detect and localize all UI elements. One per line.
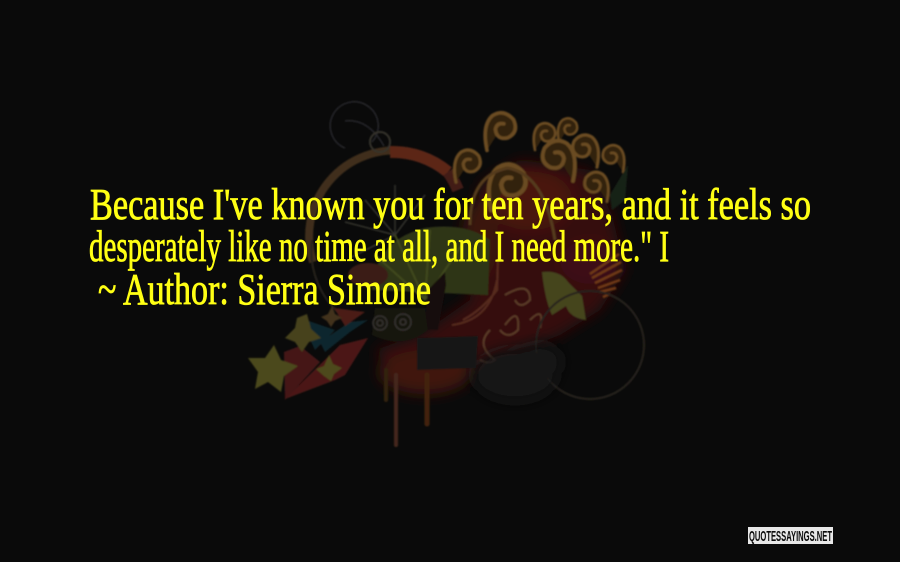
drips — [386, 370, 427, 445]
star streaks — [285, 338, 368, 399]
background illustration — [248, 102, 644, 445]
concentric circles — [372, 308, 428, 341]
author line: ~ Author: Sierra Simone — [98, 265, 431, 314]
orange fan — [590, 254, 622, 297]
stripe patch — [417, 336, 478, 370]
dark silhouette — [424, 272, 446, 330]
stars — [248, 306, 342, 392]
green fan — [372, 226, 490, 295]
quote text — [89, 180, 811, 314]
wheel ring — [309, 102, 458, 318]
orange flowers — [348, 263, 388, 287]
dark red floral mass — [375, 160, 625, 394]
dark floral — [473, 344, 562, 401]
watermark — [748, 527, 833, 545]
curl lines — [452, 260, 541, 362]
small specks — [610, 165, 628, 210]
swirls — [454, 113, 624, 240]
pale flower — [542, 272, 586, 320]
circle outline — [536, 291, 644, 399]
